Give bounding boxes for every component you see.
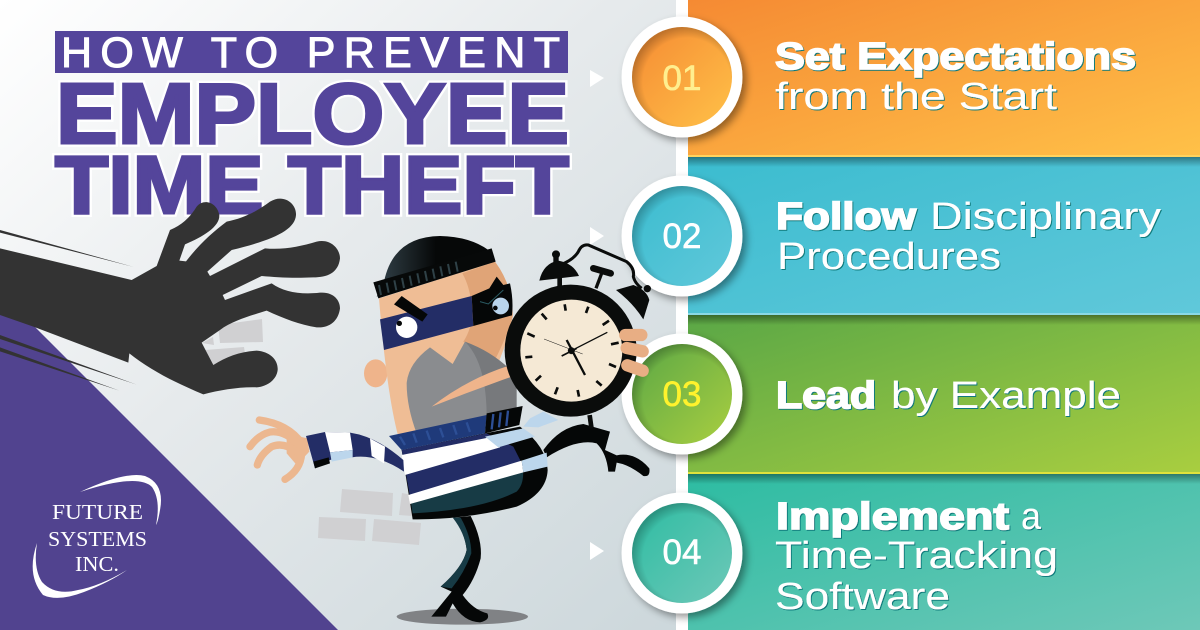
panel 4 text: a — [1021, 496, 1042, 538]
clock handle and bells — [539, 245, 651, 429]
thief character with clock — [250, 236, 651, 625]
panel 1 text: Set Expectations — [775, 36, 1136, 78]
nose — [432, 363, 517, 407]
arrow 4 — [590, 542, 604, 560]
number circle 04: 04 — [663, 533, 701, 572]
logo swoosh — [33, 475, 161, 598]
ground shadow — [397, 609, 528, 625]
number circle 03 — [622, 334, 742, 454]
panel 4 background: teal — [688, 474, 1200, 630]
logo: future systems inc: SYSTEMS — [48, 527, 147, 551]
title line: employee: EMPLOYEE — [56, 67, 569, 162]
background — [0, 0, 690, 630]
panel 1 text: from the Start — [775, 76, 1058, 118]
shadow hand reaching — [0, 199, 340, 394]
number circle 01 — [622, 16, 742, 138]
head — [379, 262, 513, 437]
number circle 01: 01 — [663, 59, 701, 98]
title line: how to prevent: HOW TO PREVENT — [61, 29, 560, 77]
panel 1 text — [775, 36, 1136, 118]
logo: future systems inc — [33, 475, 161, 598]
striped sweater — [389, 406, 558, 519]
arrow 1 — [590, 70, 604, 87]
left sleeve — [306, 432, 404, 472]
fingers on clock — [625, 335, 643, 371]
left hand — [250, 420, 309, 479]
grey stubble — [407, 342, 517, 433]
number circle 02 — [622, 176, 742, 296]
alarm clock — [505, 245, 651, 429]
clock ticks — [525, 304, 619, 397]
panel 2 background: blue — [688, 157, 1200, 315]
number circle 04 — [622, 492, 742, 614]
panel 3 text: Lead — [776, 375, 876, 417]
panel 4 text — [775, 496, 1058, 618]
logo: future systems inc: FUTURE — [52, 500, 143, 524]
panel 4 text: Software — [775, 576, 950, 618]
beanie hat — [373, 236, 496, 298]
panel 3 text — [776, 375, 1121, 417]
clock body — [505, 285, 637, 417]
panel 4 text: Time-Tracking — [775, 535, 1058, 577]
white vertical strip — [676, 0, 689, 630]
title — [55, 29, 569, 231]
legs and feet — [431, 424, 650, 622]
panel 4 text: Implement — [776, 496, 1009, 538]
panel 2 text: Procedures — [777, 236, 1001, 278]
arrow 2 — [590, 227, 604, 245]
panel 3 text: by Example — [891, 375, 1121, 417]
panel 1 background: orange — [688, 0, 1200, 157]
logo: future systems inc: INC. — [75, 552, 119, 576]
title line: time theft: TIME THEFT — [55, 140, 569, 231]
panel 2 text — [776, 196, 1161, 278]
panel 2 text: Follow — [776, 196, 917, 238]
number circle 03: 03 — [663, 375, 701, 414]
number circle 02: 02 — [663, 217, 701, 256]
clock hands — [544, 332, 607, 375]
title line: time theft: TIME THEFT — [55, 140, 569, 231]
ear — [364, 359, 387, 387]
clock face — [520, 300, 622, 402]
purple corner triangle — [0, 292, 338, 630]
background bricks — [202, 319, 421, 545]
panel 3 background: green — [688, 315, 1200, 474]
title line: employee: EMPLOYEE — [56, 67, 569, 162]
mask and eyes — [380, 277, 513, 350]
panel 2 text: Disciplinary — [930, 196, 1161, 238]
